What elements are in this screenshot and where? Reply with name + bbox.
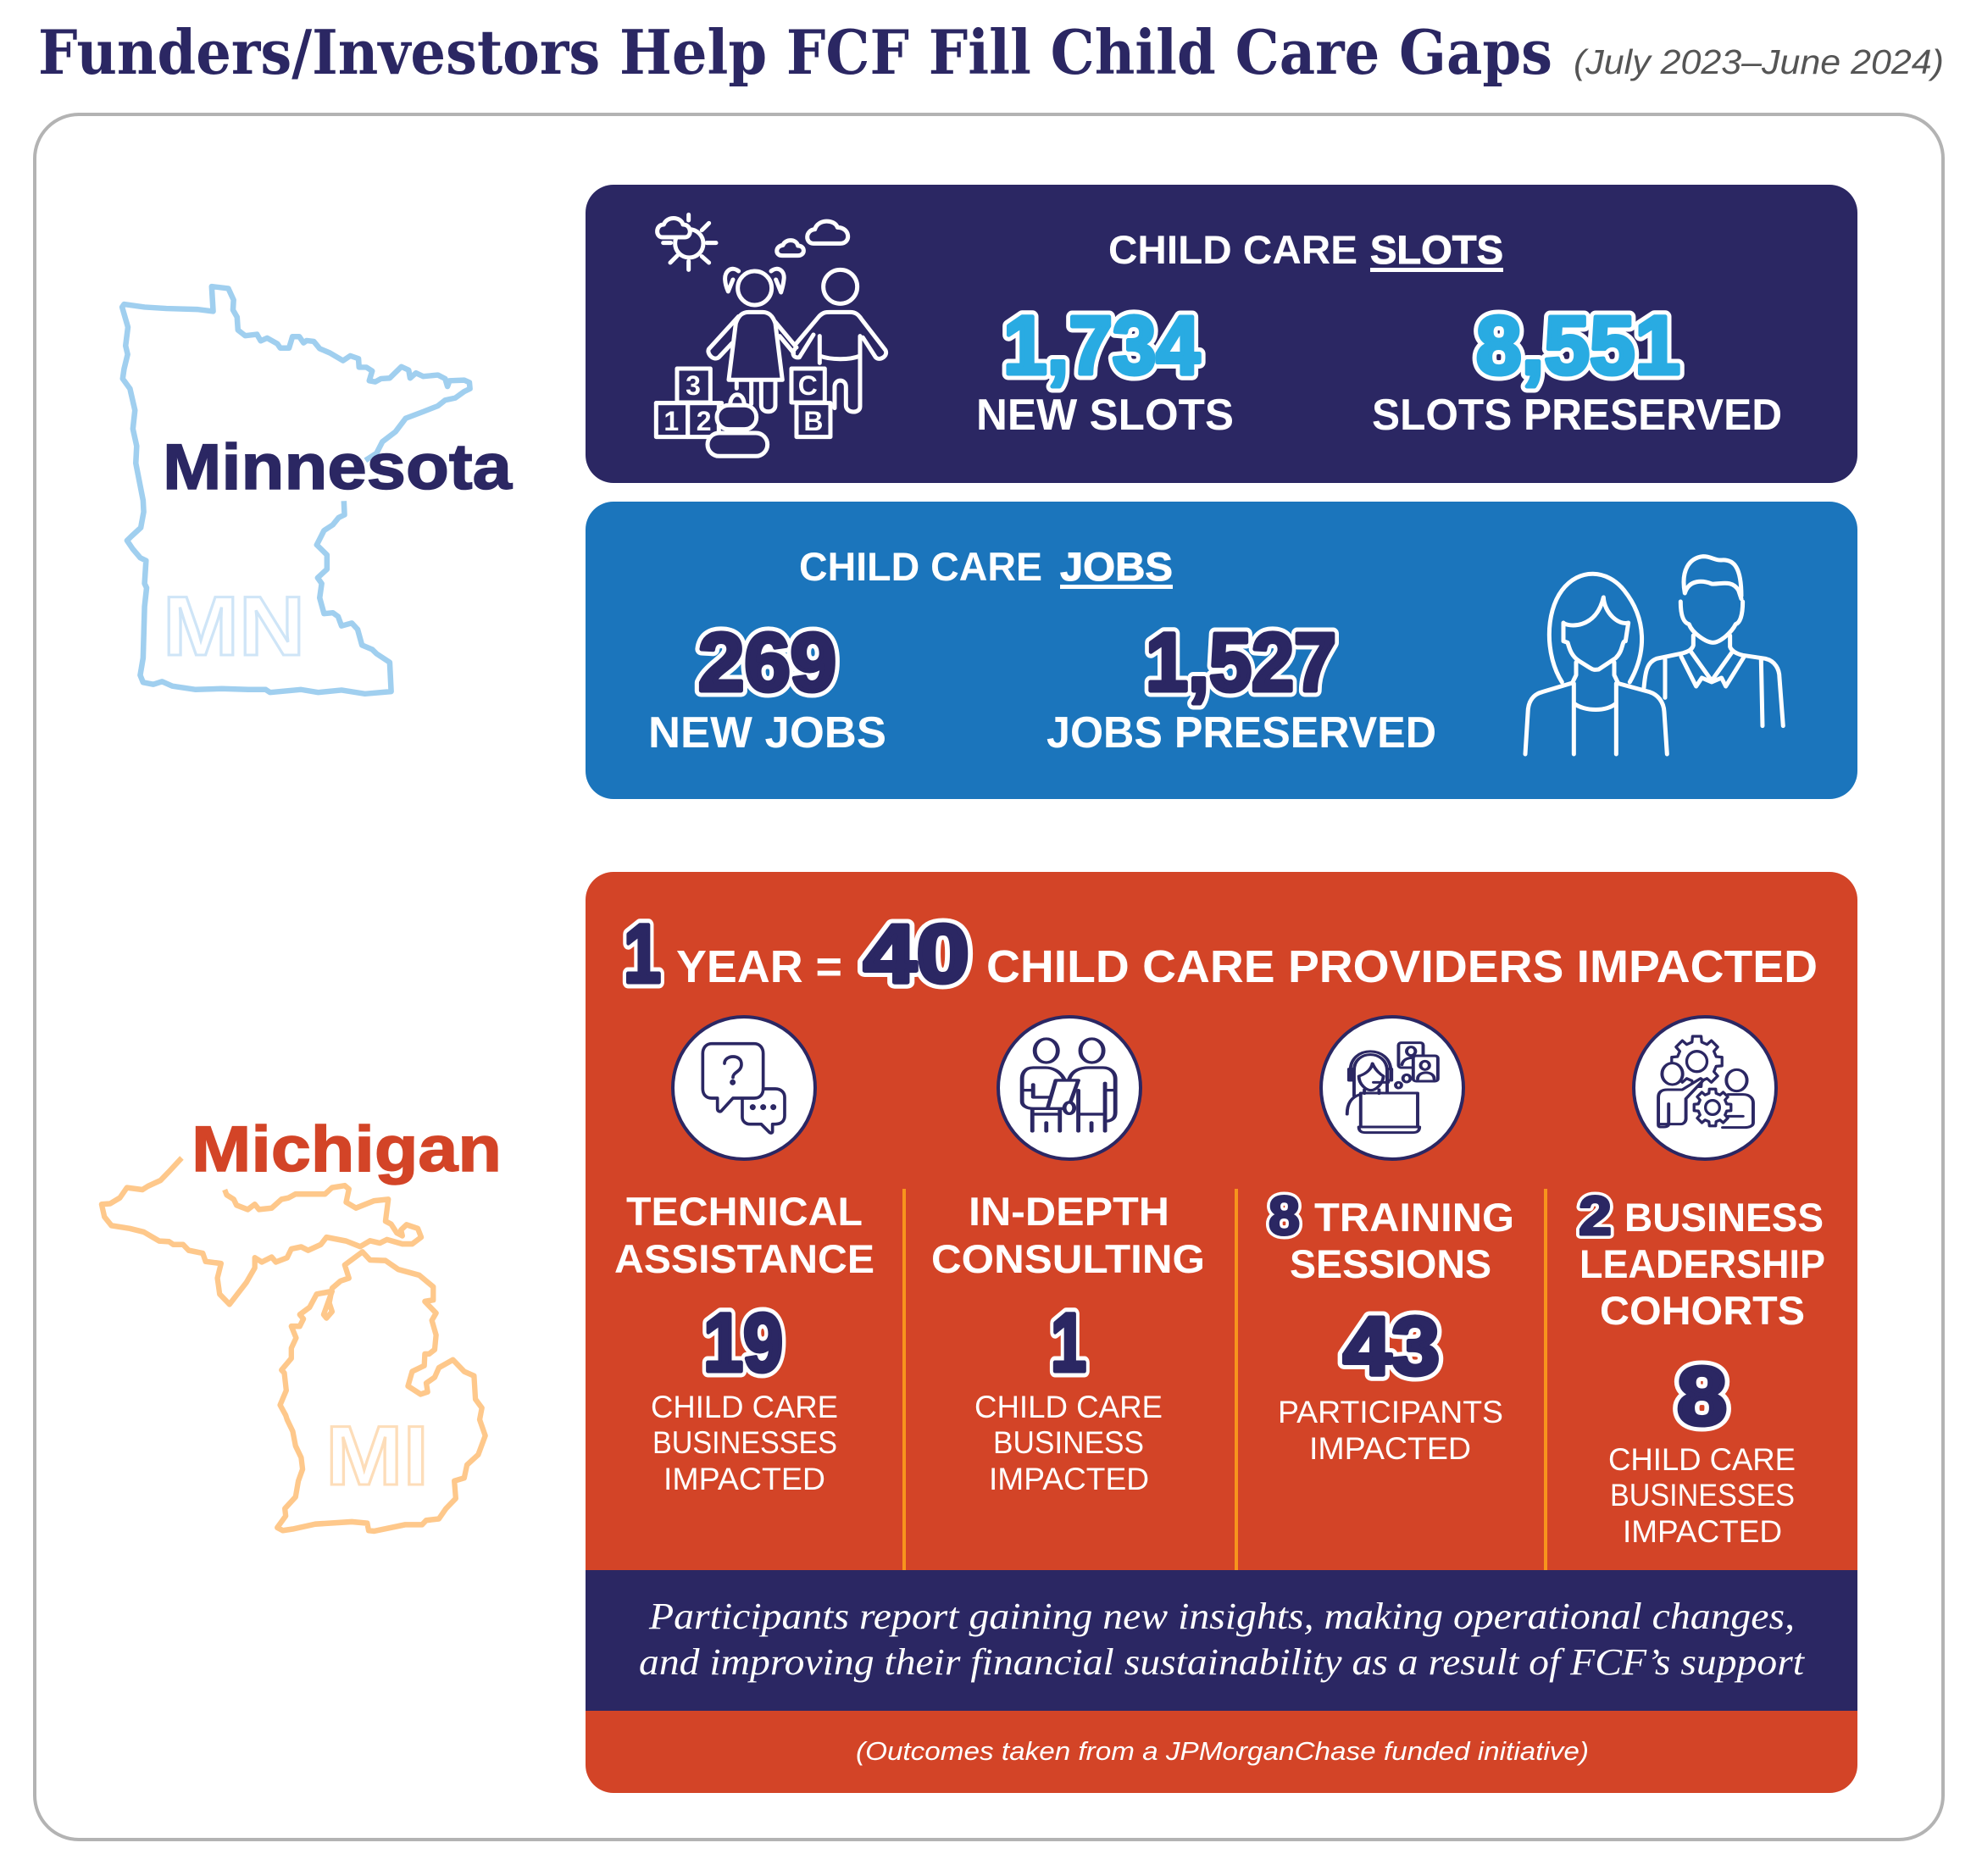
title: Funders/Investors Help FCF Fill Child Care Gaps [38,16,1552,88]
column: business leadership cohorts: LEADERSHIP [1579,1241,1825,1286]
stat: 269 new jobs: 269 [698,616,836,708]
icon: children with blocks [656,214,886,456]
panel: child care jobs [586,502,1857,799]
quote band: Participants report gaining new insights, making operational changes, [648,1596,1795,1637]
map: Minnesota outline [122,286,470,694]
column: training sessions: PARTICIPANTS [1278,1395,1503,1429]
column: business leadership cohorts: 2 [1579,1185,1612,1246]
column: technical assistance: ASSISTANCE [614,1236,874,1281]
heading: child care jobs: JOBS [1060,544,1173,589]
stat: 1,734 new slots: 1,734 [1003,299,1200,391]
icon: children with blocks: B [803,406,824,436]
footnote: (Outcomes taken from a JPMorganChase funded initiative) [856,1736,1589,1766]
icon: woman and man [1525,557,1783,754]
icon: two consultants with clipboard [998,1017,1141,1159]
stat: 1,734 new slots [976,299,1234,440]
column: business leadership cohorts: IMPACTED [1623,1514,1782,1549]
icon: children with blocks: C [798,370,818,401]
column: training sessions: 43 [1343,1300,1440,1392]
column: technical assistance: IMPACTED [663,1462,825,1496]
heading: 1 year = 40 child care providers impacted: 40 [863,907,969,1000]
state name: Minnesota: Minnesota [163,431,513,503]
column: technical assistance [614,1189,874,1496]
state abbreviation: MI: MI [325,1408,429,1502]
stat: 8,551 slots preserved: SLOTS PRESERVED [1372,391,1782,440]
stat: 8,551 slots preserved [1372,299,1782,440]
heading: 1 year = 40 child care providers impacted: 1 [624,907,661,1000]
icon: online trainer with headset [1321,1017,1463,1159]
heading: child care slots: SLOTS [1370,227,1503,272]
column: technical assistance: TECHNICAL [626,1189,863,1234]
column: technical assistance: 19 [703,1296,783,1389]
column: training sessions: 8 [1269,1185,1300,1246]
heading: child care jobs: CHILD CARE [799,544,1042,589]
column: training sessions: TRAINING [1314,1195,1514,1240]
quote band: and improving their financial sustainability as a result of FCF’s support [639,1641,1806,1683]
state name: Michigan: Michigan [192,1113,502,1185]
icon: speech bubbles [673,1017,815,1159]
stat: 1,734 new slots: NEW SLOTS [976,391,1234,440]
column: business leadership cohorts: 8 [1677,1350,1727,1442]
column: training sessions [1269,1185,1514,1466]
column: in-depth consulting: BUSINESS [993,1425,1144,1460]
column: training sessions: 43 [1343,1300,1440,1392]
quote band [586,1570,1857,1711]
stat: 8,551 slots preserved: 8,551 [1476,299,1680,391]
stat: 1,527 jobs preserved: 1,527 [1146,616,1336,708]
column: business leadership cohorts: CHILD CARE [1608,1442,1796,1477]
heading: child care slots: CHILD CARE [1108,227,1357,272]
stat: 8,551 slots preserved: 8,551 [1476,299,1680,391]
column: training sessions: IMPACTED [1309,1431,1471,1466]
heading: 1 year = 40 child care providers impacted: CHILD CARE PROVIDERS IMPACTED [986,941,1818,992]
stat: 1,527 jobs preserved [1047,616,1436,758]
map: Michigan outline [102,1157,486,1531]
heading: 1 year = 40 child care providers impacted [624,907,1818,1000]
column: business leadership cohorts [1579,1185,1825,1549]
column: training sessions: 8 [1269,1185,1300,1246]
panel: providers impacted [586,872,1857,1793]
stat: 269 new jobs [648,616,886,758]
heading: child care slots [1108,227,1503,272]
column: technical assistance: CHILD CARE [651,1390,838,1424]
heading: 1 year = 40 child care providers impacted: 1 [624,907,661,1000]
column: in-depth consulting: IMPACTED [989,1462,1149,1496]
column: business leadership cohorts: BUSINESSES [1610,1478,1795,1512]
column: business leadership cohorts: 8 [1677,1350,1727,1442]
date range subtitle: (July 2023–June 2024) [1574,42,1944,81]
icon: leaders with gears [1634,1017,1776,1159]
column: business leadership cohorts: BUSINESS [1624,1195,1824,1240]
stat: 1,734 new slots: 1,734 [1003,299,1200,391]
column: in-depth consulting: CONSULTING [931,1236,1205,1281]
stat: 269 new jobs: NEW JOBS [648,708,886,758]
stat: 269 new jobs: 269 [698,616,836,708]
heading: 1 year = 40 child care providers impacted: 40 [863,907,969,1000]
state abbreviation: MN: MN [163,579,305,673]
icon: children with blocks: 3 [686,370,701,401]
stat: 1,527 jobs preserved: 1,527 [1146,616,1336,708]
column: technical assistance: BUSINESSES [652,1425,837,1460]
stat: 1,527 jobs preserved: JOBS PRESERVED [1047,708,1436,758]
column: technical assistance: 19 [703,1296,783,1389]
panel: child care slots [586,185,1857,483]
column: in-depth consulting: 1 [1051,1296,1086,1389]
heading: 1 year = 40 child care providers impacted: YEAR = [676,941,842,992]
column: in-depth consulting [931,1189,1205,1496]
icon: children with blocks: 2 [697,406,712,436]
column: business leadership cohorts: COHORTS [1600,1288,1805,1333]
icon: children with blocks: 1 [663,406,679,436]
column: in-depth consulting: 1 [1051,1296,1086,1389]
column: in-depth consulting: IN-DEPTH [969,1189,1169,1234]
column: in-depth consulting: CHILD CARE [974,1390,1163,1424]
heading: child care jobs [799,544,1173,589]
column: business leadership cohorts: 2 [1579,1185,1612,1246]
column: training sessions: SESSIONS [1290,1241,1491,1286]
